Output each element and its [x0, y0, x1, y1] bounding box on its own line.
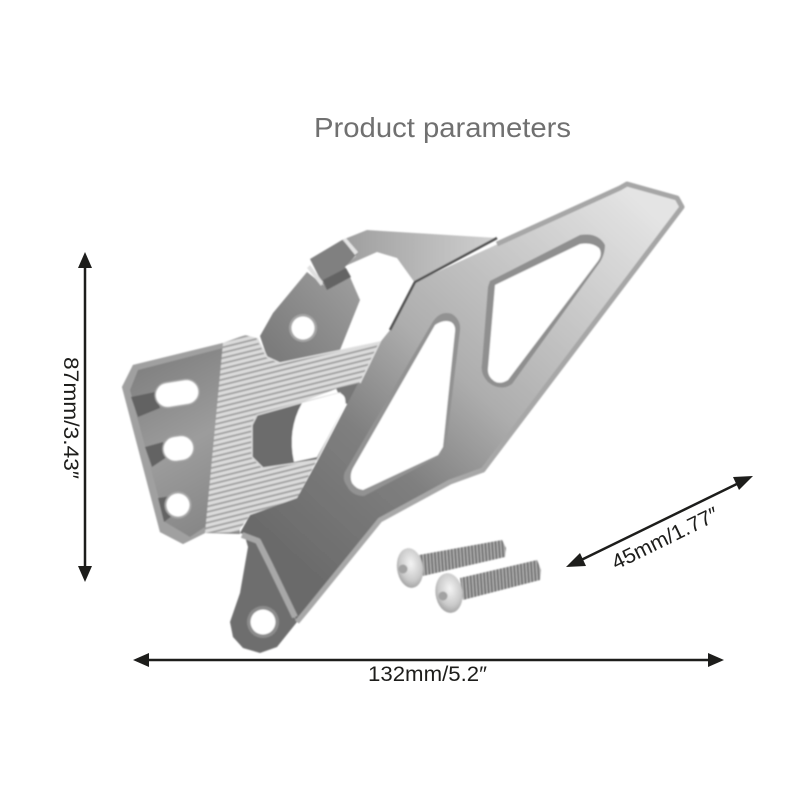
left slots and notches	[131, 378, 201, 522]
plate bevel	[122, 343, 223, 544]
dark lug	[230, 533, 297, 653]
height label: 87mm/3.43″	[59, 357, 82, 480]
back plate with mounting hole	[260, 272, 360, 365]
arm groove	[390, 238, 497, 330]
screw length label: 45mm/1.77″	[608, 503, 723, 574]
lug bevel	[242, 535, 295, 617]
screw 2	[433, 560, 541, 615]
upper arm	[342, 230, 497, 283]
screws	[394, 540, 541, 615]
screw 1	[394, 540, 506, 590]
height arrow	[78, 252, 92, 582]
ridged plate	[205, 335, 380, 533]
main blade	[240, 184, 682, 622]
blade outer bevel	[297, 184, 682, 622]
ridge plate light outline	[257, 338, 380, 383]
sprocket cover bracket	[122, 184, 682, 653]
triangular cutout	[482, 234, 605, 388]
left plate	[122, 343, 240, 544]
window with dark inset	[252, 393, 345, 468]
width arrow	[133, 653, 724, 667]
hook tab	[307, 238, 358, 290]
central cutout	[344, 313, 460, 496]
width label: 132mm/5.2″	[368, 663, 488, 686]
screw length arrow	[566, 476, 753, 567]
filler behind ridge edge	[336, 378, 364, 405]
title: Product parameters	[314, 112, 571, 143]
